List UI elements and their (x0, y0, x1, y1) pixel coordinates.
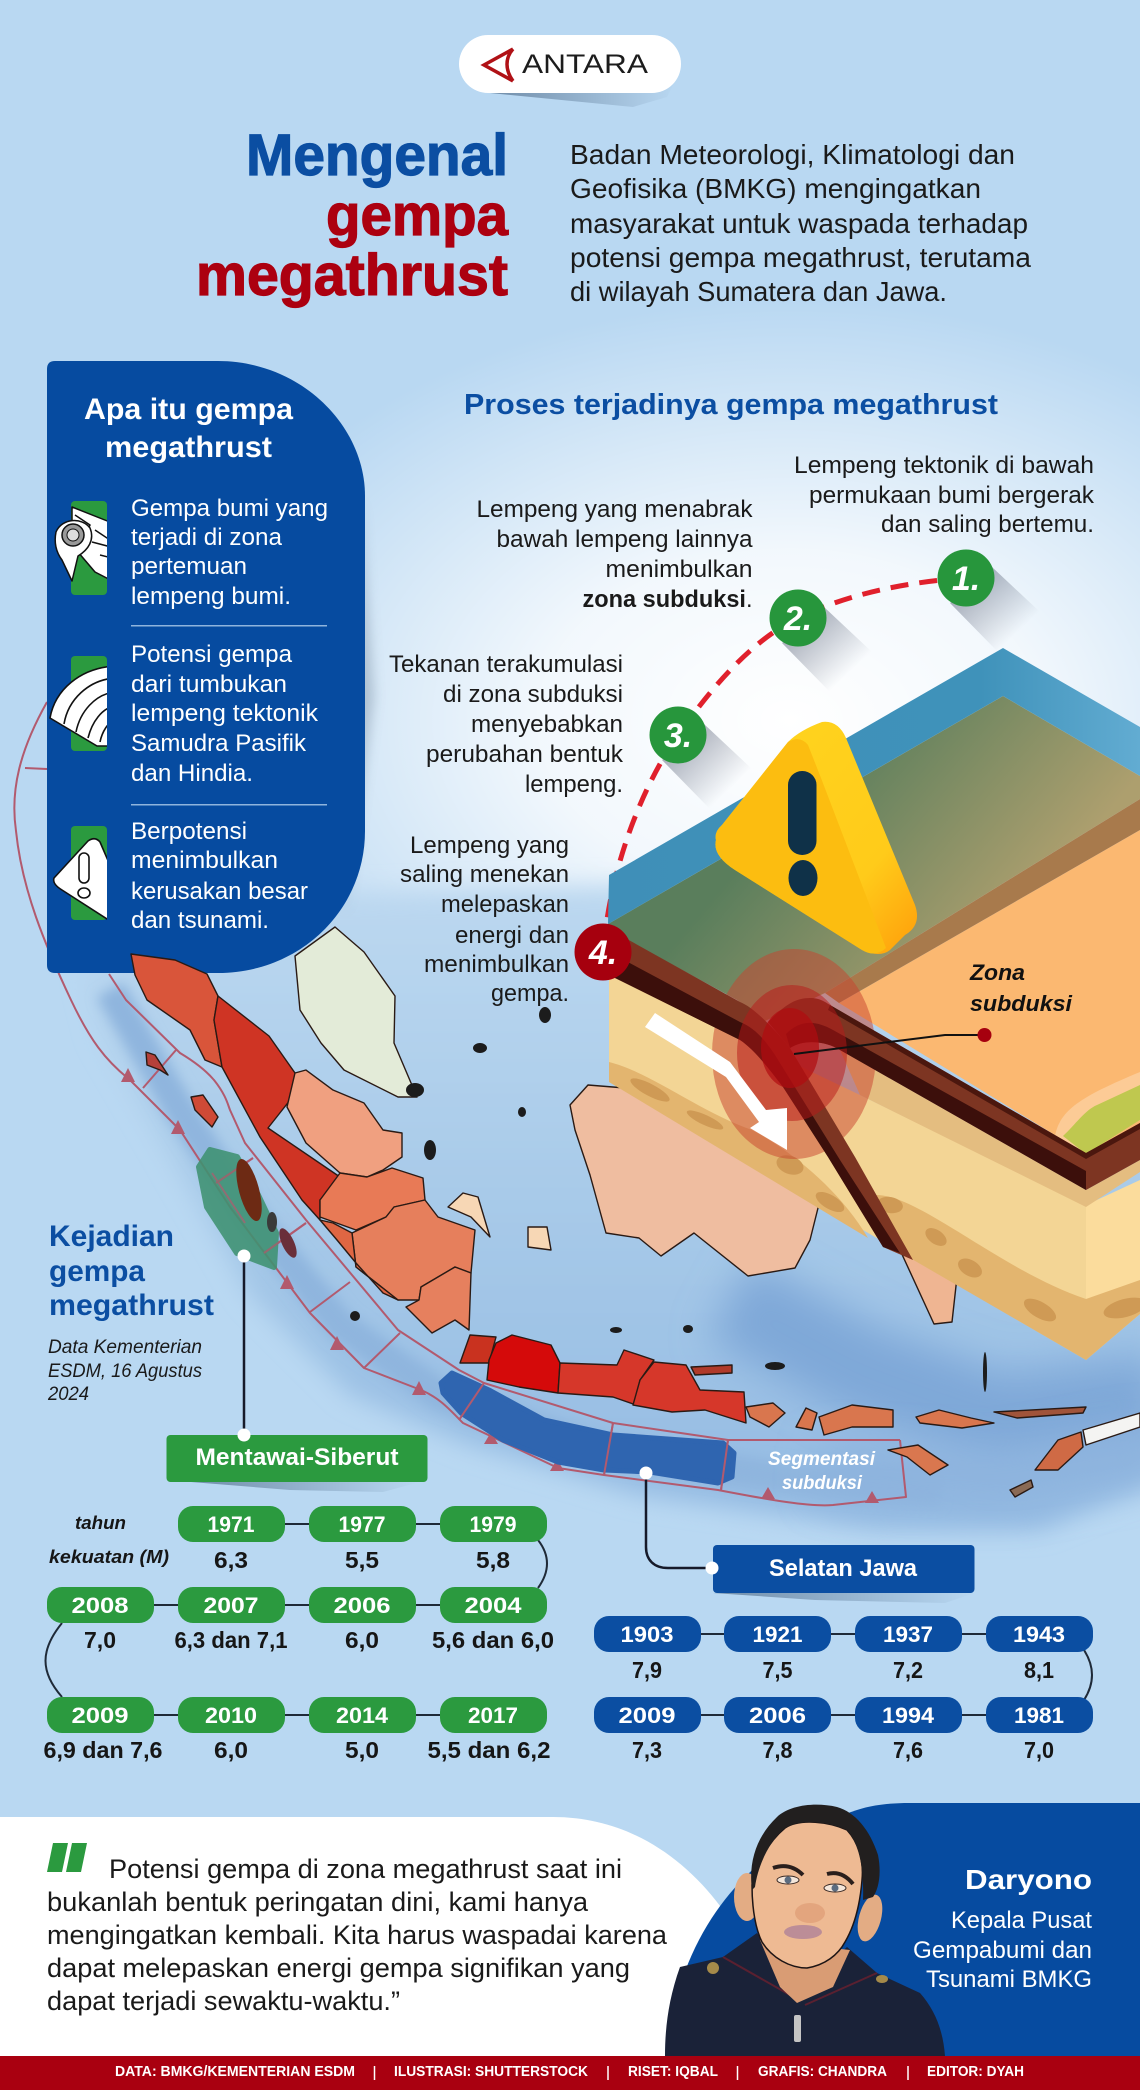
timeline: Mentawai-Siberut: 6,0 (214, 1737, 248, 1763)
icon: map and pin (54, 501, 107, 595)
timeline: Mentawai-Siberut: 5,5 (345, 1547, 379, 1573)
timeline: Mentawai-Siberut: 2004 (464, 1593, 522, 1618)
timeline: Selatan Jawa: 7,6 (893, 1737, 923, 1763)
kejadian heading: gempa (49, 1255, 145, 1288)
step 2 text: menimbulkan (606, 556, 752, 583)
timeline: Selatan Jawa: 2009 (618, 1703, 676, 1728)
green patch (1055, 1072, 1140, 1154)
heading: Proses: Proses terjadinya gempa megathrust (464, 389, 998, 421)
title: gempa (326, 183, 509, 248)
item 2 text: Potensi gempa (131, 641, 293, 668)
timeline: Mentawai-Siberut: 2014 (336, 1703, 389, 1728)
step 4 text: Lempeng yang (410, 832, 569, 859)
profile text: Daryono (965, 1864, 1092, 1895)
timeline: Mentawai-Siberut: 6,3 (214, 1547, 248, 1573)
label: Selatan Jawa (640, 1466, 975, 1603)
timeline: Mentawai-Siberut: 6,3 dan 7,1 (174, 1627, 288, 1653)
step 1 text: dan saling bertemu. (881, 511, 1094, 538)
step 4 text: menimbulkan (424, 951, 569, 978)
step 3 text (389, 651, 624, 798)
step markers: 2. (783, 600, 812, 638)
label: Selatan Jawa: Selatan Jawa (769, 1555, 918, 1582)
label: Segmentasi subduksi: Segmentasi (768, 1449, 876, 1470)
item 1 text (131, 495, 328, 610)
row legend: tahun (75, 1513, 126, 1533)
item 1 text: terjadi di zona (131, 524, 283, 551)
profile panel (665, 1803, 1140, 2056)
quote text (47, 1854, 668, 2016)
map sea background (85, 885, 1140, 1530)
timeline: Mentawai-Siberut: 2017 (468, 1703, 518, 1728)
step 4 text (400, 832, 569, 1007)
map: Sumatra provinces (131, 954, 475, 1333)
step 1 text (794, 452, 1095, 538)
step 3 text: menyebabkan (471, 711, 623, 738)
step 3 text: lempeng. (525, 771, 623, 798)
item 1 text: lempeng bumi. (131, 583, 291, 610)
timeline: Mentawai-Siberut: 2006 (334, 1593, 390, 1618)
map: Malay peninsula (295, 927, 417, 1097)
timeline: Mentawai-Siberut: 1979 (470, 1512, 516, 1537)
quote mark (47, 1843, 87, 1872)
white arrow (645, 1013, 787, 1150)
timeline: Mentawai-Siberut: 5,8 (476, 1547, 510, 1573)
profile text: Kepala Pusat (951, 1907, 1092, 1934)
title (196, 123, 509, 308)
intro text: Badan Meteorologi, Klimatologi dan (570, 139, 1015, 170)
timeline: Selatan Jawa: 7,0 (1024, 1737, 1054, 1763)
step 1 text: Lempeng tektonik di bawah (794, 452, 1094, 479)
jacket (665, 1933, 945, 2056)
icon: warning triangle (52, 826, 107, 920)
panel heading: megathrust (105, 431, 272, 464)
nose (795, 1903, 825, 1923)
step marker shadows (662, 567, 1040, 809)
timeline: Mentawai-Siberut: 1977 (338, 1512, 386, 1537)
step markers: 4. (588, 934, 617, 972)
step 2 text (476, 496, 754, 613)
quake outer ring (712, 949, 876, 1159)
step 3 text: perubahan bentuk (426, 741, 624, 768)
footer: DATA: BMKG/KEMENTERIAN ESDM (115, 2064, 355, 2080)
quote text: dapat terjadi sewaktu-waktu.” (47, 1986, 400, 2016)
label: Segmentasi subduksi: subduksi (782, 1473, 863, 1494)
timeline: Mentawai-Siberut: 6,0 (345, 1627, 379, 1653)
step 3 text: di zona subduksi (443, 681, 623, 708)
step 4 text: melepaskan (441, 891, 569, 918)
lips (784, 1925, 822, 1939)
source note (47, 1337, 202, 1405)
water surface (608, 648, 1140, 924)
row legend (49, 1513, 169, 1567)
step 2 text: zona subduksi. (582, 586, 752, 613)
3D block diagram (608, 648, 1140, 1360)
panel heading (84, 393, 293, 464)
item 3 text: menimbulkan (131, 847, 278, 874)
map: small dark islets (350, 1007, 1003, 1392)
timeline: Mentawai-Siberut: 6,9 dan 7,6 (44, 1737, 162, 1763)
source note: ESDM, 16 Agustus (48, 1361, 202, 1382)
label: Mentawai-Siberut: Mentawai-Siberut (196, 1444, 398, 1471)
item 2 text: lempeng tektonik (131, 700, 319, 727)
neck (760, 1940, 850, 2003)
item 2 text (131, 641, 319, 787)
quake inner rings (737, 985, 847, 1121)
step 2 text: Lempeng yang menabrak (476, 496, 754, 523)
rock blobs (628, 1074, 1140, 1326)
timeline: Mentawai-Siberut: 2007 (204, 1593, 258, 1618)
row legend: kekuatan (M) (49, 1547, 169, 1567)
right face (1086, 1180, 1140, 1360)
item 2 text: dari tumbukan (131, 671, 287, 698)
quote text: bukanlah bentuk peringatan dini, kami hanya (47, 1887, 589, 1917)
timeline: Mentawai-Siberut: 5,5 dan 6,2 (428, 1737, 550, 1763)
footer: ILUSTRASI: SHUTTERSTOCK (394, 2064, 588, 2080)
intro text: Geofisika (BMKG) mengingatkan (570, 173, 981, 204)
timeline: Selatan Jawa: 1994 (882, 1703, 935, 1728)
darker band under plate (840, 1050, 1140, 1207)
timeline: Selatan Jawa (594, 1616, 1093, 1763)
logo: ANTARA pill: ANTARA (522, 49, 648, 79)
footer: GRAFIS: CHANDRA (758, 2064, 887, 2080)
item 3 text: kerusakan besar (131, 878, 308, 905)
timeline: Mentawai-Siberut: 2010 (205, 1703, 257, 1728)
timeline: Mentawai-Siberut (44, 1506, 554, 1763)
intro text: di wilayah Sumatera dan Jawa. (570, 276, 947, 307)
footer: EDITOR: DYAH (927, 2064, 1024, 2080)
brown stripe (825, 799, 1140, 1003)
quote text: Potensi gempa di zona megathrust saat ini (109, 1854, 622, 1884)
panel heading: Apa itu gempa (84, 393, 293, 426)
timeline: Mentawai-Siberut: 1971 (208, 1512, 254, 1537)
item 1 text: Gempa bumi yang (131, 495, 328, 522)
label: Mentawai-Siberut (166, 1250, 428, 1492)
item 2 text: Samudra Pasifik (131, 730, 307, 757)
profile text: Gempabumi dan (913, 1937, 1092, 1964)
right plate band (768, 998, 1140, 1190)
timeline: Mentawai-Siberut: 5,0 (345, 1737, 379, 1763)
source note: 2024 (47, 1384, 89, 1405)
timeline: Selatan Jawa: 2006 (749, 1703, 806, 1728)
ears (734, 1873, 760, 1921)
timeline: Selatan Jawa: 8,1 (1024, 1657, 1054, 1683)
face (752, 1822, 862, 1968)
source note: Data Kementerian (48, 1337, 202, 1358)
callout: zona subduksi: subduksi (970, 991, 1073, 1016)
timeline: Selatan Jawa: 1943 (1013, 1622, 1065, 1647)
timeline: Selatan Jawa: 1921 (752, 1622, 802, 1647)
timeline: Mentawai-Siberut: 2009 (72, 1703, 128, 1728)
map: islands (146, 1052, 960, 1324)
kejadian heading: Kejadian (49, 1220, 174, 1253)
olive ground under water (608, 696, 1140, 1021)
rock layer (609, 1062, 868, 1238)
map: Selatan Jawa highlight (441, 1373, 734, 1483)
red dashed arc (603, 578, 966, 952)
item 3 text (131, 818, 308, 934)
step 4 text: saling menekan (400, 861, 569, 888)
brows and eyes (773, 1866, 853, 1884)
timeline: Selatan Jawa: 7,9 (632, 1657, 662, 1683)
intro text (570, 139, 1032, 307)
footer (0, 2056, 1140, 2090)
timeline: Mentawai-Siberut: 5,6 dan 6,0 (432, 1627, 554, 1653)
orange plate top (839, 830, 1140, 1154)
logo: ANTARA pill (459, 35, 681, 107)
title: megathrust (196, 243, 508, 308)
panel: Apa itu gempa megathrust (47, 361, 374, 973)
item 1 text: pertemuan (131, 553, 247, 580)
intro text: masyarakat untuk waspada terhadap (570, 208, 1028, 239)
timeline: Selatan Jawa: 1981 (1014, 1703, 1064, 1728)
timeline: Selatan Jawa: 7,8 (762, 1737, 793, 1763)
step 4 text: gempa. (491, 980, 569, 1007)
profile text: Tsunami BMKG (926, 1966, 1092, 1993)
quote panel (0, 1817, 730, 2056)
timeline: Mentawai-Siberut: 2008 (72, 1593, 128, 1618)
step markers (574, 550, 994, 980)
icon: earth layers dome (49, 656, 107, 751)
callout: zona subduksi (794, 960, 1073, 1054)
label: Segmentasi subduksi (768, 1449, 876, 1494)
front face (609, 975, 1086, 1360)
item 3 text: Berpotensi (131, 818, 247, 845)
step markers: 1. (952, 560, 980, 598)
callout: zona subduksi: Zona (969, 960, 1025, 985)
step markers: 3. (664, 717, 692, 755)
step 3 text: Tekanan terakumulasi (389, 651, 623, 678)
zipper (794, 2015, 801, 2042)
map: Mentawai-Siberut highlight (199, 1150, 306, 1267)
map: subduction segments (14, 702, 906, 1505)
title: Mengenal (246, 123, 508, 188)
icon: warning sign (715, 722, 917, 954)
intro text: potensi gempa megathrust, terutama (570, 242, 1032, 273)
profile text (913, 1864, 1092, 1993)
background glow (0, 280, 1140, 1140)
timeline: Selatan Jawa: 7,5 (762, 1657, 793, 1683)
timeline: Mentawai-Siberut: 7,0 (84, 1627, 116, 1653)
step 2 text: bawah lempeng lainnya (496, 526, 753, 553)
timeline: Selatan Jawa: 1903 (620, 1622, 674, 1647)
quote text: dapat melepaskan energi gempa signifikan yang (47, 1953, 630, 1983)
step 4 text: energi dan (455, 922, 569, 949)
kejadian heading: megathrust (49, 1289, 214, 1322)
hair (751, 1805, 880, 1900)
portrait: Daryono (665, 1805, 945, 2056)
map: Java and Nusa Tenggara (460, 1335, 1140, 1497)
timeline: Selatan Jawa: 1937 (883, 1622, 933, 1647)
item 2 text: dan Hindia. (131, 760, 253, 787)
timeline: Selatan Jawa: 7,3 (632, 1737, 662, 1763)
footer: RISET: IQBAL (628, 2064, 718, 2080)
item 3 text: dan tsunami. (131, 907, 269, 934)
quote text: mengingatkan kembali. Kita harus waspadai karena (47, 1920, 668, 1950)
kejadian heading (49, 1220, 214, 1322)
step 1 text: permukaan bumi bergerak (809, 482, 1095, 509)
sinking plate band (609, 929, 913, 1260)
timeline: Selatan Jawa: 7,2 (893, 1657, 923, 1683)
